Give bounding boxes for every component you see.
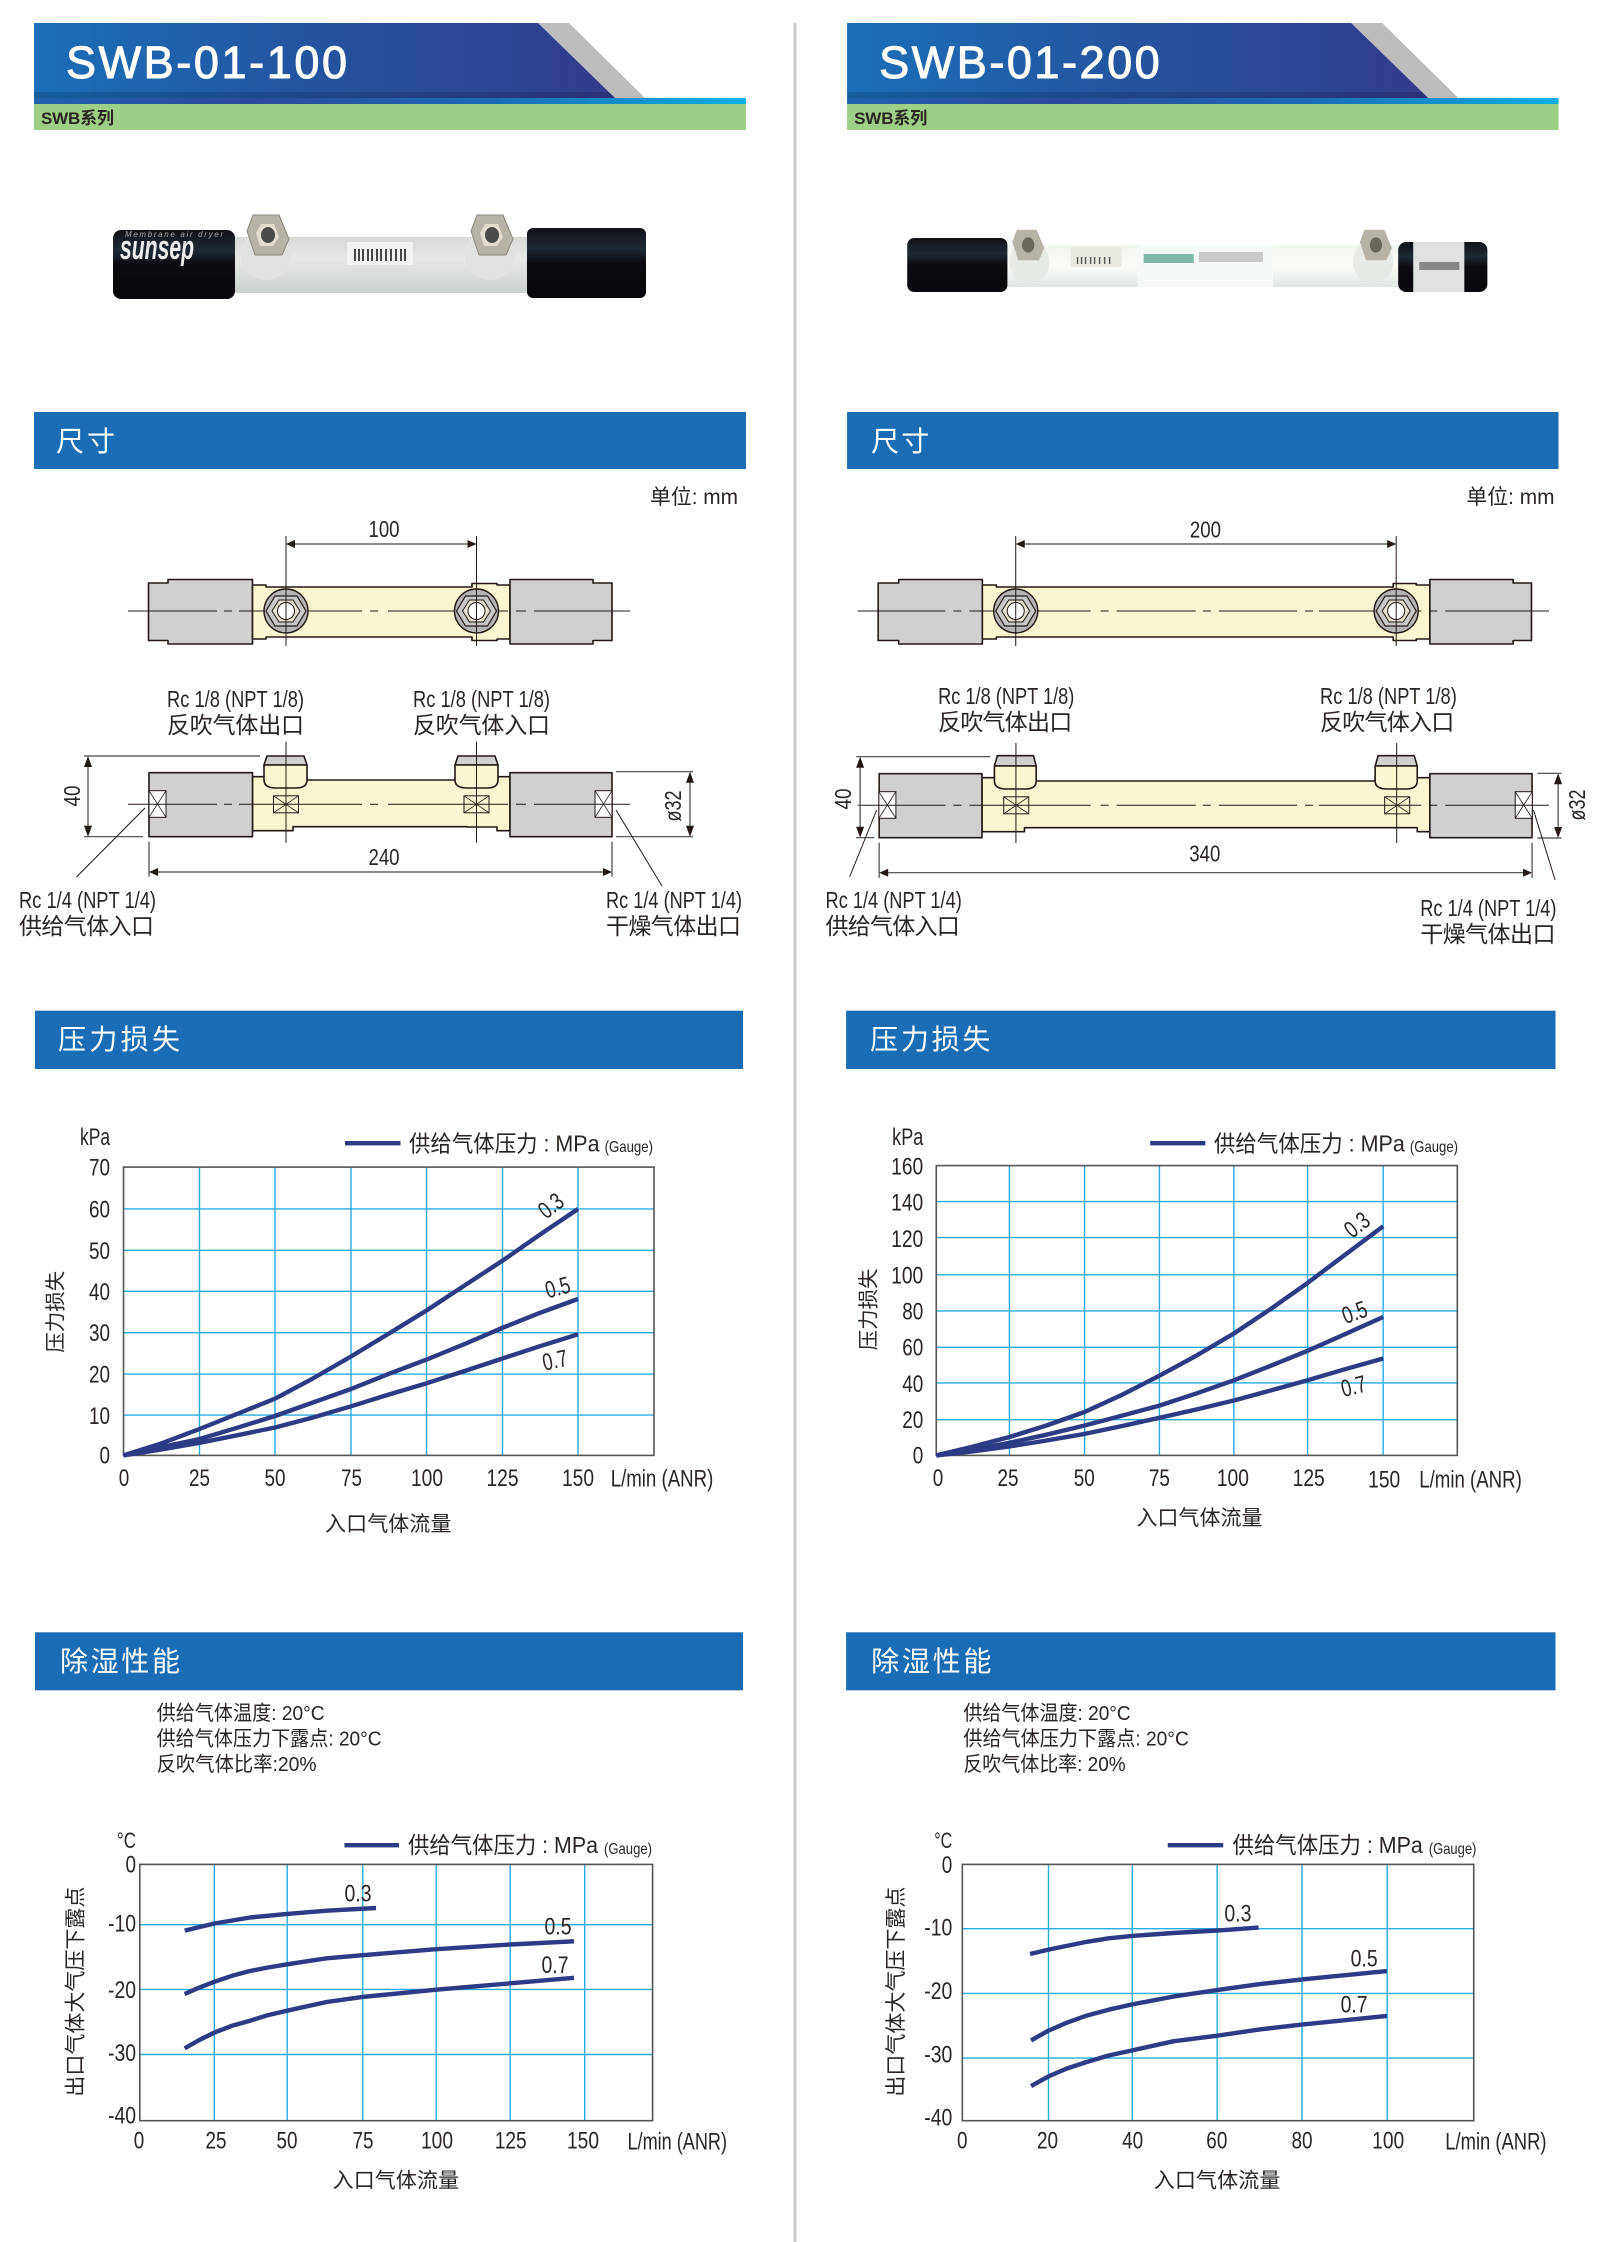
y axis ticks <box>924 1852 952 2131</box>
dimension 40 <box>59 756 260 837</box>
port label: supply inlet: 供给气体入口 <box>826 913 960 939</box>
port label: purge inlet <box>1320 683 1457 735</box>
leader: dry outlet <box>616 810 662 886</box>
axis labels: L/min (ANR) <box>628 2129 727 2156</box>
curve labels <box>533 1188 573 1377</box>
axis labels: 入口气体流量 <box>1154 2169 1280 2192</box>
x axis ticks: 125 <box>486 1465 518 1492</box>
axis labels <box>885 1828 1546 2192</box>
y axis ticks: 140 <box>891 1190 923 1216</box>
axis labels <box>44 1124 713 1536</box>
port label: purge inlet: Rc 1/8 (NPT 1/8) <box>1320 683 1457 709</box>
x axis ticks: 25 <box>997 1465 1019 1492</box>
y axis ticks: 0 <box>942 1852 952 1879</box>
x axis ticks: 25 <box>206 2127 226 2154</box>
y axis ticks: 30 <box>89 1320 110 1347</box>
section heading: pressure loss: 压力损失 <box>58 1024 180 1055</box>
section heading: dehumidification: 除湿性能 <box>871 1646 991 1677</box>
port label: dry outlet <box>606 887 742 939</box>
port label: dry outlet: Rc 1/4 (NPT 1/4) <box>1420 895 1557 921</box>
port label: supply inlet <box>19 887 156 939</box>
legend <box>1168 1832 1476 1858</box>
x axis ticks: 0 <box>933 1465 943 1492</box>
curve 0.7 <box>185 1978 574 2048</box>
axis labels: 压力损失 <box>857 1268 880 1350</box>
chart: pressure loss SWB-01-100 <box>44 1124 713 1536</box>
dimension 240 <box>149 842 612 877</box>
dimension 340: 340 <box>1189 841 1220 867</box>
x axis ticks: 100 <box>1372 2127 1404 2154</box>
x axis ticks: 125 <box>1293 1465 1325 1492</box>
axis labels: 入口气体流量 <box>1136 1507 1263 1530</box>
curve labels: 0.5 <box>542 1272 573 1304</box>
product photo: SWB-01-100 dryer: sunsep <box>120 229 194 267</box>
curve 0.3 <box>185 1908 376 1931</box>
curve labels: 0.3 <box>1339 1207 1376 1244</box>
test conditions: 供给气体压力下露点: 20°C <box>963 1727 1189 1750</box>
curve 0.3 <box>124 1209 578 1455</box>
port label: dry outlet: 干燥气体出口 <box>606 913 741 939</box>
legend: (Gauge) <box>1429 1841 1476 1858</box>
curve labels: 0.5 <box>1351 1945 1378 1972</box>
dimension 240: 240 <box>368 844 400 870</box>
y axis ticks: -40 <box>108 2103 136 2130</box>
dimension diameter 32: ø32 <box>660 790 686 822</box>
section heading: dehumidification <box>846 1632 1556 1690</box>
port label: purge outlet: 反吹气体出口 <box>167 712 304 738</box>
curve labels: 0.7 <box>1338 1371 1369 1403</box>
product photo: SWB-01-100 dryer <box>113 215 646 299</box>
x axis ticks: 25 <box>189 1465 210 1492</box>
y axis ticks: 60 <box>902 1334 923 1361</box>
x axis ticks <box>134 2127 599 2154</box>
y axis ticks: -10 <box>924 1914 952 1941</box>
y axis ticks: -20 <box>924 1978 952 2005</box>
header banner SWB-01-200: SWB-01-200 <box>879 37 1160 88</box>
dimension 40 <box>830 757 990 838</box>
chart: dew point SWB-01-200 <box>885 1828 1546 2192</box>
curve labels: 0.5 <box>544 1914 572 1940</box>
y axis ticks: 100 <box>891 1263 923 1290</box>
y axis ticks: 40 <box>902 1371 923 1398</box>
x axis ticks: 150 <box>562 1465 594 1492</box>
x axis ticks: 0 <box>134 2127 144 2154</box>
column divider <box>794 23 796 2242</box>
axis labels: 入口气体流量 <box>333 2169 459 2192</box>
legend: 供给气体压力 : MPa <box>409 1130 600 1156</box>
y axis ticks: 80 <box>902 1298 923 1325</box>
x axis ticks: 50 <box>264 1465 286 1492</box>
leader: supply inlet <box>76 808 145 877</box>
side view drawing <box>128 742 630 843</box>
side view drawing <box>858 743 1549 843</box>
x axis ticks: 100 <box>411 1465 443 1492</box>
port label: supply inlet: Rc 1/4 (NPT 1/4) <box>826 887 962 913</box>
port label: purge outlet: 反吹气体出口 <box>938 709 1072 735</box>
port label: dry outlet: Rc 1/4 (NPT 1/4) <box>606 887 742 913</box>
section heading: dimensions <box>34 412 746 469</box>
y axis ticks: 20 <box>902 1407 923 1434</box>
header banner SWB-01-100 <box>34 23 746 130</box>
test conditions: 反吹气体比率:20% <box>157 1753 317 1776</box>
leader: dry outlet <box>1533 810 1555 880</box>
dimension diameter 32: ø32 <box>1564 790 1590 820</box>
unit note: 单位: mm <box>650 486 738 509</box>
port label: supply inlet: 供给气体入口 <box>19 913 154 939</box>
chart: pressure loss SWB-01-200 <box>857 1124 1522 1530</box>
axis labels: °C <box>934 1828 952 1853</box>
y axis ticks <box>89 1155 110 1470</box>
axis labels <box>64 1828 727 2192</box>
y axis ticks: 0 <box>100 1442 110 1470</box>
section heading: dehumidification: 除湿性能 <box>60 1646 180 1677</box>
x axis ticks: 40 <box>1122 2127 1143 2154</box>
x axis ticks: 125 <box>495 2127 527 2154</box>
axis labels: kPa <box>892 1124 924 1151</box>
y axis ticks: 160 <box>891 1154 923 1180</box>
x axis ticks: 0 <box>957 2127 968 2154</box>
port label: purge outlet: Rc 1/8 (NPT 1/8) <box>938 683 1074 709</box>
legend <box>1150 1131 1458 1156</box>
dimension 40: 40 <box>59 786 85 806</box>
dimension 200 <box>1016 517 1396 548</box>
dimension 100 <box>286 516 476 548</box>
curve 0.7 <box>936 1358 1383 1455</box>
curve 0.5 <box>936 1317 1383 1455</box>
x axis ticks: 20 <box>1037 2127 1058 2154</box>
y axis ticks <box>891 1154 923 1469</box>
x axis ticks <box>933 1465 1400 1494</box>
legend <box>344 1832 652 1858</box>
product photo: SWB-01-100 dryer: Membrane air dryer <box>125 230 223 239</box>
dimension diameter 32 <box>616 772 694 837</box>
header banner SWB-01-100: SWB-01-100 <box>66 37 347 88</box>
dimension 200: 200 <box>1190 517 1221 542</box>
curve 0.5 <box>185 1941 574 1994</box>
x axis ticks <box>957 2127 1404 2154</box>
x axis ticks: 75 <box>341 1465 362 1492</box>
port label: supply inlet: Rc 1/4 (NPT 1/4) <box>19 887 156 913</box>
unit note: 单位: mm <box>1466 486 1555 509</box>
y axis ticks <box>108 1851 136 2130</box>
curve 0.3 <box>1030 1928 1259 1954</box>
y axis ticks: 0 <box>913 1443 923 1469</box>
y axis ticks: -10 <box>108 1910 136 1937</box>
port label: purge inlet: 反吹气体入口 <box>1320 709 1454 735</box>
curve labels <box>344 1881 572 1979</box>
port label: purge inlet: 反吹气体入口 <box>413 712 550 738</box>
test conditions <box>963 1702 1189 1776</box>
legend: 供给气体压力 : MPa <box>408 1832 598 1858</box>
header banner SWB-01-200: SWB系列 <box>854 108 927 128</box>
curve labels: 0.3 <box>344 1881 372 1908</box>
axis labels: °C <box>117 1828 136 1853</box>
dimension 40: 40 <box>830 789 856 810</box>
axis labels: L/min (ANR) <box>1445 2129 1546 2156</box>
port label: dry outlet <box>1420 895 1557 947</box>
leader: supply inlet <box>850 810 877 877</box>
curve 0.5 <box>1031 1971 1387 2040</box>
legend <box>345 1130 653 1156</box>
x axis ticks: 80 <box>1291 2127 1313 2154</box>
port label: purge inlet <box>413 686 550 738</box>
curve 0.7 <box>1031 2016 1387 2086</box>
port label: purge inlet: Rc 1/8 (NPT 1/8) <box>413 686 550 712</box>
section heading: dimensions: 尺寸 <box>56 426 115 457</box>
legend: (Gauge) <box>1410 1139 1458 1156</box>
x axis ticks: 0 <box>119 1465 129 1492</box>
top view drawing <box>128 536 630 646</box>
x axis ticks: 100 <box>421 2127 453 2154</box>
curve 0.5 <box>124 1299 578 1455</box>
axis labels: kPa <box>80 1124 110 1151</box>
top view drawing <box>858 536 1549 646</box>
axis labels: 出口气体大气压下露点 <box>885 1887 908 2097</box>
y axis ticks: -30 <box>108 2040 136 2067</box>
y axis ticks: 120 <box>891 1226 923 1253</box>
curve 0.3 <box>936 1226 1383 1455</box>
curve labels: 0.3 <box>533 1188 569 1225</box>
y axis ticks: 40 <box>89 1279 110 1306</box>
x axis ticks: 150 <box>1368 1467 1400 1494</box>
axis labels <box>857 1124 1522 1530</box>
curve labels: 0.5 <box>1338 1296 1371 1330</box>
port label: purge outlet <box>167 686 304 738</box>
curve labels: 0.7 <box>542 1952 568 1979</box>
curve 0.7 <box>124 1334 578 1455</box>
legend: 供给气体压力 : MPa <box>1214 1131 1405 1156</box>
section heading: pressure loss <box>35 1011 743 1069</box>
port label: supply inlet <box>826 887 962 939</box>
y axis ticks: 0 <box>126 1851 136 1878</box>
curve labels: 0.7 <box>1341 1992 1368 2019</box>
legend: 供给气体压力 : MPa <box>1232 1832 1423 1858</box>
test conditions: 供给气体温度: 20°C <box>963 1702 1131 1725</box>
dimension 340 <box>879 841 1532 878</box>
x axis ticks: 75 <box>352 2127 374 2154</box>
panel: SWB-01-200 column <box>826 23 1590 2192</box>
y axis ticks: 10 <box>89 1403 110 1430</box>
test conditions <box>157 1702 382 1776</box>
header banner SWB-01-200 <box>847 23 1559 130</box>
x axis ticks: 50 <box>1074 1465 1095 1492</box>
chart: dew point SWB-01-100 <box>64 1828 727 2192</box>
panel: SWB-01-100 column <box>19 23 746 2192</box>
y axis ticks: 50 <box>89 1238 110 1265</box>
x axis ticks: 75 <box>1149 1465 1170 1492</box>
dimension 100: 100 <box>368 516 400 542</box>
section heading: pressure loss <box>846 1011 1556 1069</box>
port label: purge outlet: Rc 1/8 (NPT 1/8) <box>167 686 304 712</box>
section heading: dimensions: 尺寸 <box>871 426 929 457</box>
curve labels: 0.7 <box>540 1345 570 1377</box>
section heading: dehumidification <box>35 1632 743 1690</box>
axis labels: 入口气体流量 <box>325 1513 452 1536</box>
test conditions: 反吹气体比率: 20% <box>963 1753 1126 1776</box>
axis labels: 压力损失 <box>44 1271 67 1353</box>
curve labels <box>1224 1900 1378 2019</box>
port label: dry outlet: 干燥气体出口 <box>1420 921 1556 947</box>
y axis ticks: -20 <box>108 1977 136 2004</box>
test conditions: 供给气体压力下露点: 20°C <box>157 1727 382 1750</box>
x axis ticks <box>119 1465 594 1492</box>
y axis ticks: -30 <box>924 2041 952 2068</box>
header banner SWB-01-100: SWB系列 <box>41 108 114 128</box>
port label: purge outlet <box>938 683 1074 735</box>
x axis ticks: 100 <box>1217 1465 1249 1492</box>
x axis ticks: 50 <box>276 2127 298 2154</box>
axis labels: L/min (ANR) <box>1419 1467 1522 1494</box>
axis labels: 出口气体大气压下露点 <box>64 1887 87 2097</box>
curve labels <box>1338 1207 1376 1403</box>
y axis ticks: -40 <box>924 2104 952 2131</box>
y axis ticks: 60 <box>89 1196 110 1223</box>
test conditions: 供给气体温度: 20°C <box>157 1702 325 1725</box>
axis labels: L/min (ANR) <box>611 1466 713 1492</box>
dimension diameter 32 <box>1537 773 1590 838</box>
x axis ticks: 60 <box>1206 2127 1227 2154</box>
legend: (Gauge) <box>605 1139 653 1156</box>
section heading: pressure loss: 压力损失 <box>870 1024 990 1055</box>
legend: (Gauge) <box>604 1841 652 1858</box>
section heading: dimensions <box>847 412 1559 469</box>
product photo: SWB-01-200 dryer <box>907 230 1487 292</box>
y axis ticks: 70 <box>89 1155 110 1182</box>
x axis ticks: 150 <box>567 2127 599 2154</box>
y axis ticks: 20 <box>89 1362 110 1389</box>
curve labels: 0.3 <box>1224 1900 1251 1927</box>
